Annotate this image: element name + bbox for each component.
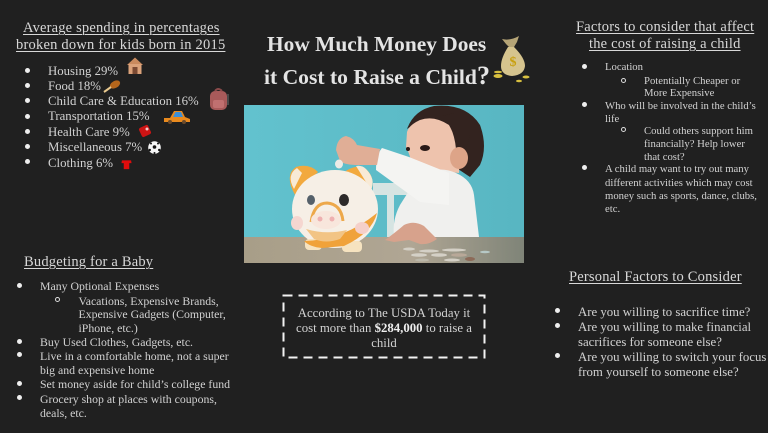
list: personal questions: Are you willing to sacrifice time?	[578, 305, 750, 319]
list: factors: life	[605, 113, 619, 125]
callout: USDA cost: According to The USDA Today it	[298, 306, 470, 320]
list: budgeting tips: Many Optional Expenses	[40, 279, 159, 293]
list: factors: Location	[605, 61, 643, 73]
list: factors: Could others support him	[644, 125, 753, 137]
baby ear	[450, 147, 468, 169]
icon: house	[127, 58, 143, 74]
baby eye	[420, 145, 430, 151]
icon: car	[164, 111, 190, 124]
list: budgeting tips: deals, etc.	[40, 406, 87, 420]
callout: USDA cost: child	[371, 336, 397, 350]
list: budgeting tips: iPhone, etc.)	[78, 321, 138, 335]
baby hand on table	[385, 223, 437, 244]
baby sleeve	[376, 148, 449, 205]
callout: USDA cost	[282, 294, 486, 358]
list: budgeting tips: Vacations, Expensive Brands,	[78, 294, 219, 308]
list: budgeting tips: Live in a comfortable home, not a super	[40, 349, 229, 363]
baby body	[394, 169, 479, 237]
icon: red shirt	[122, 160, 132, 170]
list: personal questions: Are you willing to make financial	[578, 320, 751, 334]
heading: average spending	[16, 20, 226, 53]
icon: money bag	[494, 36, 530, 82]
list: factors: different activities which may cost	[605, 177, 753, 189]
table	[244, 237, 524, 263]
callout: USDA cost: cost more than $284,000 to raise a	[296, 321, 472, 335]
list: budgeting tips	[17, 279, 230, 420]
list: spending categories: Food 18%	[48, 79, 101, 93]
title	[264, 32, 490, 90]
photo: baby with piggy bank	[244, 105, 524, 263]
heading: average spending: Average spending in percentages	[23, 20, 220, 36]
list: spending categories: Housing 29%	[48, 64, 118, 78]
baby hair	[407, 106, 484, 177]
list: spending categories: Miscellaneous 7%	[48, 140, 142, 154]
chair	[373, 183, 409, 237]
icon: first aid kit	[139, 124, 151, 138]
baby hand with coin	[336, 136, 380, 165]
list: spending categories: Clothing 6%	[48, 156, 113, 170]
icon: chicken leg	[104, 80, 120, 93]
icon: money bag: $	[510, 55, 516, 70]
list: spending categories: Child Care & Education 16%	[48, 94, 199, 108]
list: factors: Who will be involved in the child’s	[605, 100, 756, 112]
heading: factors: the cost of raising a child	[589, 36, 741, 52]
panel: factors affecting cost	[576, 19, 757, 215]
list: factors: A child may want to try out many	[605, 163, 749, 175]
list: budgeting tips: Expensive Gadgets (Computer,	[78, 307, 226, 321]
list: personal questions: from yourself to someone else?	[578, 365, 739, 379]
list: factors: financially? Help lower	[644, 138, 745, 150]
list: factors: Potentially Cheaper or	[644, 75, 740, 87]
list: spending categories: Transportation 15%	[48, 109, 150, 123]
heading: factors: Factors to consider that affect	[576, 19, 754, 35]
list: factors: that cost?	[644, 151, 685, 163]
coins on table	[403, 248, 490, 262]
list: budgeting tips: big and expensive home	[40, 363, 154, 377]
panel: personal factors	[555, 269, 766, 379]
heading: average spending: broken down for kids born in 2015	[16, 37, 225, 53]
title: it Cost to Raise a Child?	[264, 61, 490, 90]
title: How Much Money Does	[267, 32, 486, 56]
list: budgeting tips: Buy Used Clothes, Gadgets, etc.	[40, 335, 193, 349]
list: budgeting tips: Grocery shop at places with coupons,	[40, 392, 217, 406]
list: factors: More Expensive	[644, 87, 714, 99]
list: personal questions: sacrifices for someone else?	[578, 335, 722, 349]
list: budgeting tips: Set money aside for child’s college fund	[40, 377, 230, 391]
list: spending categories	[25, 64, 199, 170]
baby face	[406, 118, 460, 173]
heading: factors	[576, 19, 754, 52]
list: factors: money such as sports, dance, clubs,	[605, 190, 757, 202]
list: factors	[582, 61, 757, 215]
heading: budgeting: Budgeting for a Baby	[24, 254, 153, 270]
icon: backpack	[210, 88, 229, 110]
list: factors: etc.	[605, 203, 620, 215]
list: spending categories: Health Care 9%	[48, 125, 130, 139]
piggy bank	[290, 166, 378, 252]
list: personal questions	[555, 305, 766, 379]
icon: soccer ball	[148, 141, 161, 154]
heading: personal factors: Personal Factors to Consider	[569, 269, 742, 285]
panel: average spending	[16, 20, 226, 170]
panel: budgeting for a baby	[17, 254, 230, 420]
list: personal questions: Are you willing to switch your focus	[578, 350, 766, 364]
